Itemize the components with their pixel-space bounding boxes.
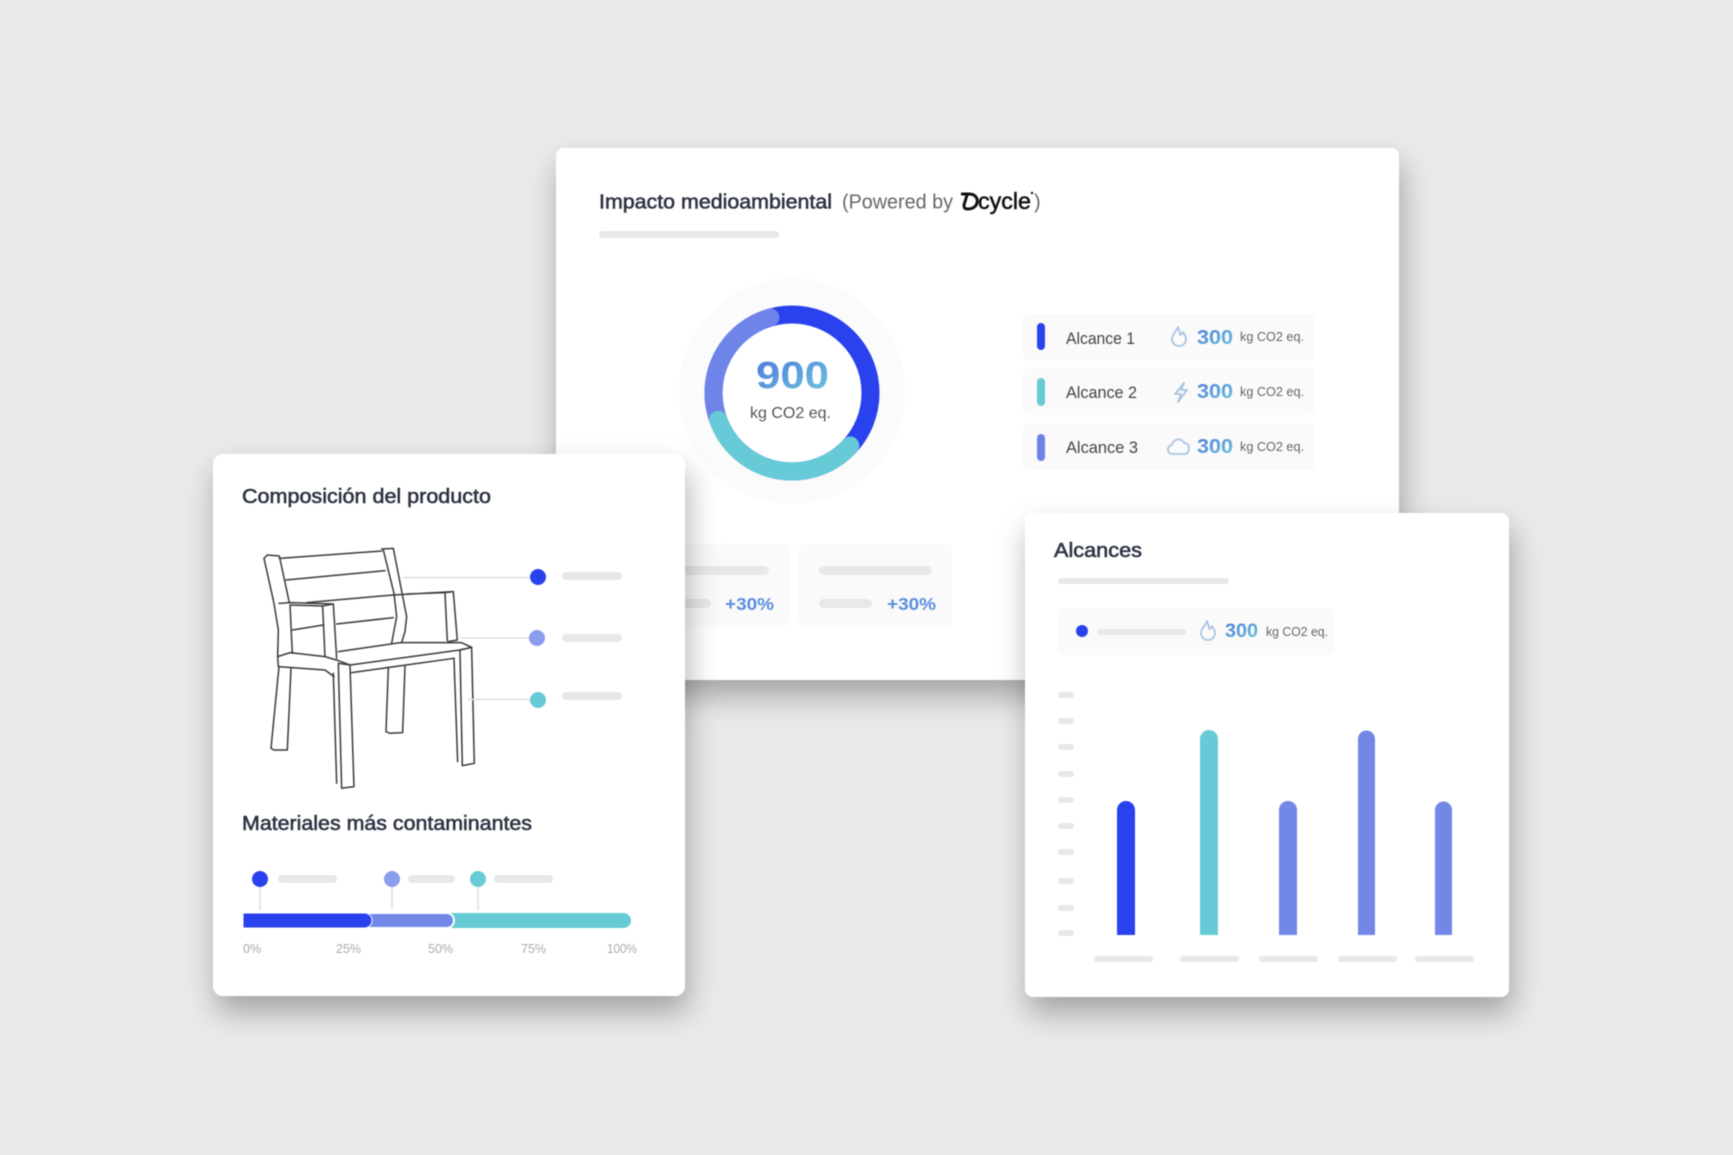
legend row: alcance 2: kg CO2 eq. [1240, 385, 1304, 399]
subtitle placeholder [1058, 578, 1229, 584]
legend row: alcance 2: Alcance 2 [1066, 384, 1137, 402]
donut chart: 900 [756, 355, 829, 397]
legend row: alcance 1 [1023, 314, 1315, 361]
legend row: alcance 1: Alcance 1 [1066, 330, 1135, 348]
value chip [1058, 608, 1335, 655]
y axis placeholders [1058, 692, 1074, 936]
value chip: kg CO2 eq. [1266, 625, 1328, 639]
heading: composición del producto: Composición del producto [242, 486, 491, 508]
card background [1025, 513, 1509, 997]
panel: composición del producto [213, 454, 685, 996]
legend row: alcance 3 [1023, 423, 1315, 470]
percent axis: 0% [243, 942, 261, 956]
heading: impacto medioambiental: Impacto medioambiental [599, 192, 832, 214]
stacked bar legend [252, 871, 553, 910]
percent axis: 25% [336, 942, 361, 956]
percent axis [243, 942, 637, 956]
stat box 2: +30% [887, 594, 936, 614]
donut chart [679, 278, 905, 504]
subtitle placeholder [599, 231, 779, 238]
callout: seat material [460, 630, 622, 646]
stat box 1: +30% [725, 594, 774, 614]
legend row: alcance 3: 300 [1197, 436, 1233, 458]
bar chart [1117, 730, 1452, 935]
legend row: alcance 1: kg CO2 eq. [1240, 330, 1304, 344]
heading: materiales más contaminantes: Materiales más contaminantes [242, 813, 532, 835]
stat box 2 [799, 544, 952, 627]
stat box 1 [660, 544, 789, 627]
legend row: alcance 1: 300 [1197, 327, 1233, 349]
closing parenthesis: ) [1034, 192, 1041, 214]
powered by text: (Powered by [842, 192, 953, 214]
legend row: alcance 2 [1023, 368, 1315, 415]
donut chart: kg CO2 eq. [750, 405, 831, 422]
legend row: alcance 2: 300 [1197, 381, 1233, 403]
percent axis: 75% [521, 942, 546, 956]
percent axis: 50% [428, 942, 453, 956]
callout: backrest material [403, 569, 622, 585]
illustration: chair [264, 548, 474, 788]
card background [556, 148, 1399, 680]
callout: leg material [468, 692, 622, 708]
panel: alcances [1025, 513, 1509, 997]
heading: alcances: Alcances [1054, 540, 1142, 562]
percent axis: 100% [607, 942, 637, 956]
logo: Dcycle: cycle [978, 188, 1031, 214]
card background [213, 454, 685, 996]
stacked bar chart [243, 913, 631, 928]
legend row: alcance 3: Alcance 3 [1066, 439, 1138, 457]
value chip: 300 [1225, 621, 1258, 642]
panel: impacto medioambiental [556, 148, 1399, 680]
x axis placeholders [1094, 956, 1474, 962]
legend row: alcance 3: kg CO2 eq. [1240, 440, 1304, 454]
